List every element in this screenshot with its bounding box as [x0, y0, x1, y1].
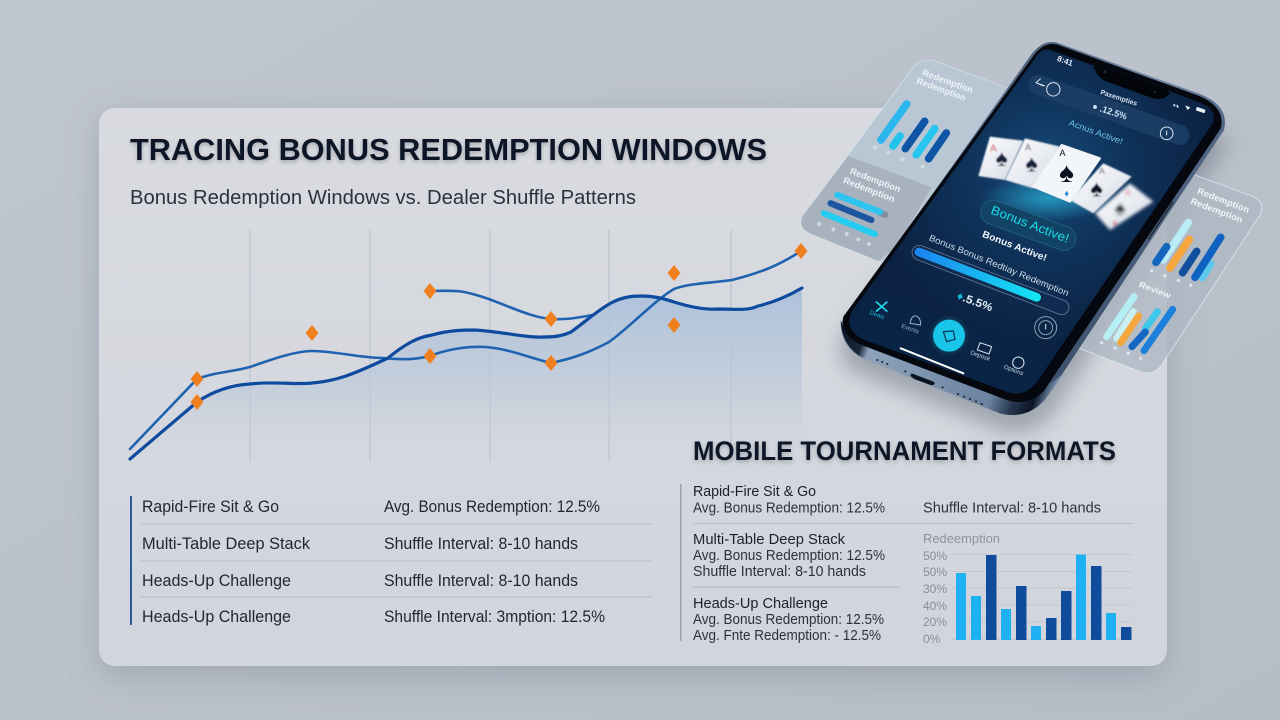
card heading text: Redemption [921, 67, 975, 95]
card 5: ♥ [1112, 219, 1118, 229]
format: rapid-fire: Avg. Bonus Redemption: 12.5% [693, 500, 885, 516]
nav: center button [930, 316, 968, 354]
nav: deposit: Deposit [969, 350, 991, 363]
notch [1093, 66, 1170, 99]
subtitle: Bonus Redemption Windows vs. Dealer Shuffle Patterns [130, 187, 636, 209]
card 2 [1005, 138, 1060, 188]
thin upper line [130, 251, 801, 449]
area under curve [130, 288, 802, 462]
row: heads-up: Heads-Up Challenge [142, 572, 291, 590]
top bar value: ● .12.5% [1091, 101, 1129, 122]
active label: Acnus Active! [1068, 117, 1124, 146]
card 5 [1095, 183, 1153, 230]
phone and floating cards (drawn at 3x, scaled down) [801, 40, 1262, 433]
nav: events: Events [900, 324, 920, 335]
card 3: ♠ [1059, 157, 1074, 188]
back arrow and icons [1036, 79, 1173, 140]
status icons [1173, 104, 1206, 113]
row: heads-up: Shuffle Interval: 8-10 hands [384, 572, 578, 590]
main panel [99, 108, 1167, 666]
glass card: right [1075, 173, 1262, 373]
row: heads-up second: Heads-Up Challenge [142, 608, 291, 626]
card 4 [1070, 163, 1132, 213]
playing cards [978, 137, 1153, 230]
format: multi-table: Avg. Bonus Redemption: 12.5% [693, 548, 885, 564]
side button [1148, 202, 1173, 239]
y axis labels: 40% [923, 599, 947, 613]
y axis labels: 20% [923, 615, 947, 629]
format: multi-table [693, 532, 885, 580]
row: rapid-fire: Avg. Bonus Redemption: 12.5% [384, 498, 600, 516]
black bezel [843, 44, 1222, 402]
row: heads-up second: Shuffle Interval: 3mption: 12.5% [384, 608, 605, 626]
progress value: ♦.5.5% [955, 290, 994, 314]
status time: 8:41 [1056, 54, 1075, 68]
card 2: A [1025, 143, 1032, 153]
bottom speakers and port [876, 359, 983, 405]
card heading text: Redemption [915, 76, 967, 103]
chart title: Redeemption [923, 531, 1000, 546]
nav: deals [869, 302, 887, 321]
y axis labels: 0% [923, 632, 941, 646]
row: heads-up second [142, 608, 605, 626]
card 1: ♠ [995, 145, 1008, 171]
format: heads-up [693, 596, 884, 644]
thin upper segment [430, 291, 593, 319]
lower section of left card [801, 156, 932, 261]
phone shadow [840, 70, 1230, 433]
title: TRACING BONUS REDEMPTION WINDOWS [130, 132, 767, 167]
card heading text: Redemption [1189, 196, 1244, 225]
screen [850, 50, 1214, 394]
card heading text [1189, 186, 1251, 225]
card 5: ♠ [1115, 197, 1126, 220]
bonus active badge [980, 200, 1076, 251]
top bar label: Paxempties [1099, 89, 1138, 108]
bottom navigation band [850, 324, 1054, 394]
format: heads-up: Heads-Up Challenge [693, 596, 828, 612]
format table: left [130, 496, 652, 626]
format: multi-table: Multi-Table Deep Stack [693, 532, 846, 548]
card 2: ♠ [1025, 150, 1038, 177]
y axis labels: 50% [923, 565, 947, 579]
row: heads-up [142, 572, 578, 590]
card 1 [978, 137, 1023, 180]
y axis labels: 30% [923, 582, 947, 596]
card 3: ♦ [1064, 189, 1069, 199]
row: multi-table: Multi-Table Deep Stack [142, 535, 311, 553]
info icon [1035, 317, 1057, 339]
bonus active badge: Bonus Active! [989, 203, 1071, 246]
format: rapid-fire [693, 484, 1101, 516]
format: rapid-fire: Shuffle Interval: 8-10 hands [923, 500, 1101, 516]
y axis labels [923, 549, 947, 646]
row: rapid-fire: Rapid-Fire Sit & Go [142, 498, 279, 516]
nav: deposit [969, 343, 992, 363]
card second heading [842, 166, 902, 204]
nav: deals: Deals [869, 310, 885, 321]
thick line [130, 288, 802, 459]
row: multi-table: Shuffle Interval: 8-10 hands [384, 535, 578, 553]
metal frame [841, 42, 1225, 415]
format: heads-up: Avg. Fnte Redemption: - 12.5% [693, 628, 881, 644]
card horizontal bars [824, 195, 885, 234]
bar chart: redemption [923, 531, 1132, 646]
card 4: A [1099, 166, 1105, 176]
glass card: left [801, 60, 1013, 262]
redemption caption: Bonus Bonus Redtiay Redemption [928, 233, 1070, 298]
card heading text [915, 67, 975, 103]
card 5: A [1125, 188, 1131, 198]
card 3: A [1059, 148, 1066, 158]
card second heading: Redemption [849, 166, 902, 194]
orange diamond markers [190, 243, 808, 410]
progress bar [919, 252, 1062, 307]
lower metal edge [841, 320, 1063, 415]
format list: right [680, 484, 1133, 644]
nav: options: Options [1003, 365, 1024, 377]
card 3 [1033, 145, 1100, 202]
nav: events [900, 316, 921, 335]
row: rapid-fire [142, 498, 600, 516]
card upper bars [1156, 223, 1221, 277]
card bar chart [881, 104, 946, 159]
card heading text: Redemption [1196, 186, 1251, 215]
bars [956, 554, 1132, 640]
card second heading: Redemption [842, 175, 896, 204]
bonus active label: Bonus Active! [981, 229, 1048, 264]
top bar [1028, 75, 1190, 145]
format: rapid-fire: Rapid-Fire Sit & Go [693, 484, 816, 500]
section heading: mobile tournament formats: MOBILE TOURNAMENT FORMATS [693, 436, 1116, 466]
nav: options [1004, 356, 1024, 376]
y axis labels: 50% [923, 549, 947, 563]
card 4: ♠ [1090, 176, 1103, 203]
format: multi-table: Shuffle Interval: 8-10 hands [693, 564, 866, 580]
line chart: redemption vs shuffle [130, 230, 808, 462]
home indicator [901, 348, 963, 373]
glow behind cards [988, 182, 1091, 220]
row: multi-table [142, 535, 578, 553]
card 1: A [990, 144, 997, 155]
card label: Review [1138, 279, 1173, 301]
card lower bars [1107, 297, 1173, 351]
phone [833, 40, 1233, 415]
format: heads-up: Avg. Bonus Redemption: 12.5% [693, 612, 884, 628]
